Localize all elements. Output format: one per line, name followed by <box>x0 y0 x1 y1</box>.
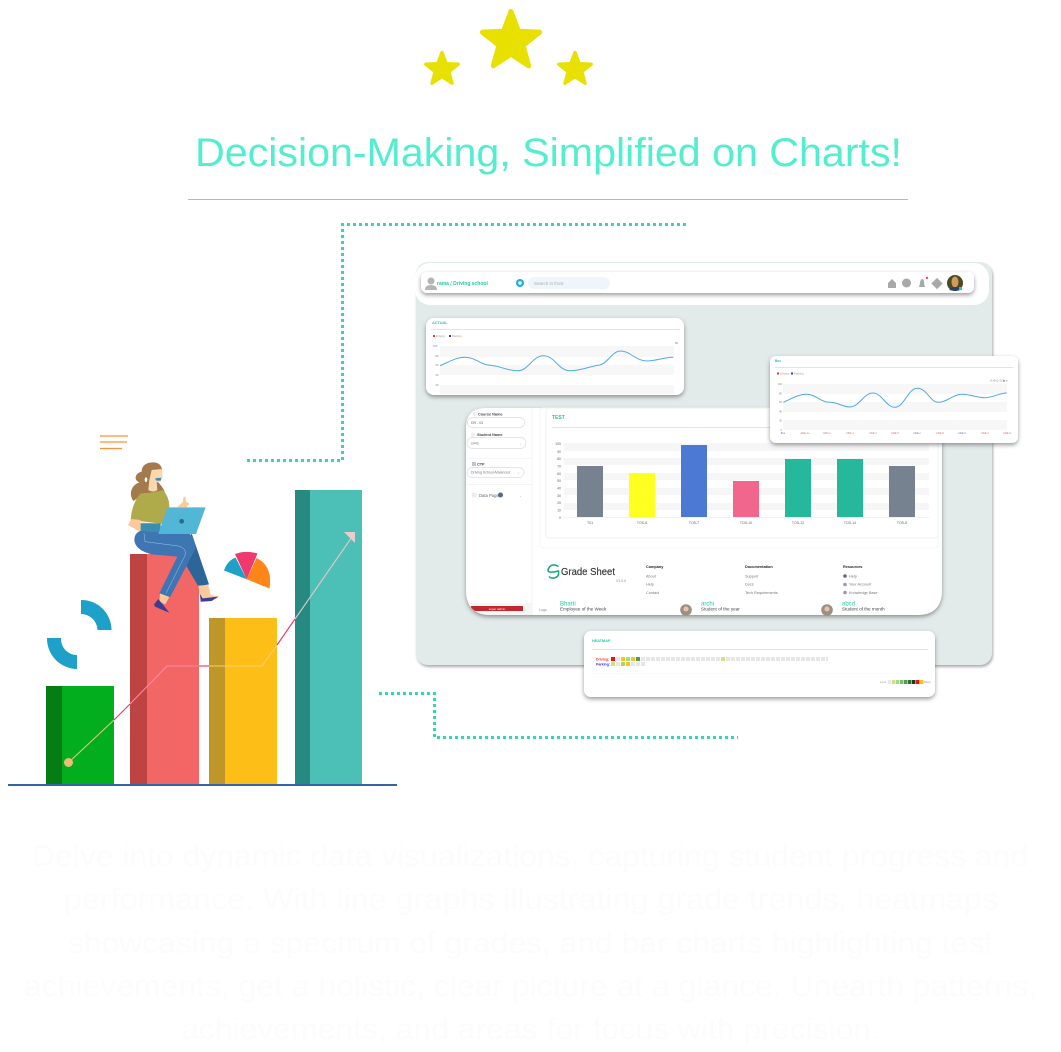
panel: right line chart card: 40 <box>779 410 783 414</box>
footer: link columns: Contact <box>646 591 660 595</box>
panel: heatmap card: HEATMAP <box>592 639 611 643</box>
icon: blue donut chart <box>47 600 112 669</box>
bar chart: TEST: TOS-7 <box>689 521 699 525</box>
panel: right line chart card: ADE-9 <box>1003 431 1011 435</box>
bar chart: TEST: TOS-6 <box>637 521 647 525</box>
footer: student highlights <box>539 602 885 616</box>
footer: student highlights: archi <box>701 602 714 608</box>
panel: actual line chart card <box>426 318 684 395</box>
panel: right line chart card: HBA-c <box>823 431 831 435</box>
panel: right line chart card: 100 <box>778 382 783 386</box>
icon: three stars <box>426 12 591 83</box>
panel: main content area: super admin <box>489 607 506 611</box>
footer: Grade Sheet logo <box>548 565 626 583</box>
panel: actual line chart card: 20 <box>435 383 439 387</box>
panel: right line chart card: 60 <box>779 400 783 404</box>
footer: Grade Sheet logo: V1.0.0 <box>616 579 626 583</box>
sidebar filters: Data Page <box>479 493 499 498</box>
bar chart: TEST: 70 <box>557 464 561 468</box>
panel: right line chart card: ADE-2 <box>981 431 989 435</box>
panel: right line chart card: ⊖ ⊕ Q ☰ ▣ ≡ <box>990 378 1008 382</box>
footer: link columns: Your Account <box>849 582 872 586</box>
text block: description <box>24 840 1037 1046</box>
panel: right line chart card: 20 <box>779 418 783 422</box>
panel: dashboard header: rama / Driving school <box>437 281 488 287</box>
panel: right line chart card: ADE-5 <box>891 431 899 435</box>
sidebar filters: ⌄ <box>517 470 520 474</box>
footer: link columns: Tech Requirements <box>745 591 778 595</box>
sidebar filters: ⌄ <box>519 442 522 446</box>
footer: link columns <box>646 565 878 595</box>
sidebar filters: CTP <box>477 462 485 466</box>
icon: pie chart <box>224 552 270 588</box>
bar chart: TEST: 80 <box>557 457 561 461</box>
bar chart: TEST: T01 <box>587 521 593 525</box>
panel: right line chart card: Driving <box>780 372 789 376</box>
panel: actual line chart card: 40 <box>435 373 439 377</box>
footer: link columns: Company <box>646 565 664 569</box>
bar chart: TEST: 0 <box>559 516 561 520</box>
sidebar filters: Driving School Advanced <box>471 470 510 474</box>
panel: right line chart card: ADE-c <box>913 431 921 435</box>
panel: actual line chart card: 60 <box>435 363 439 367</box>
panel: right line chart card: ADE-7 <box>869 431 877 435</box>
bar chart: TEST: TOS-14 <box>844 521 856 525</box>
footer: link columns: Support <box>745 574 759 578</box>
footer: student highlights: Logo <box>539 608 547 612</box>
bar chart: TEST: 30 <box>557 494 561 498</box>
panel: actual line chart card: Driving <box>436 334 445 338</box>
footer: link columns: Resources <box>843 565 862 569</box>
footer: student highlights: abcd <box>842 602 855 608</box>
arrow: dotted connector bottom <box>379 694 738 738</box>
bar chart: TEST: TEST <box>552 415 565 421</box>
panel: actual line chart card: Parking <box>452 334 462 338</box>
bar chart: TEST: 40 <box>557 486 561 490</box>
chart: illustrated bars <box>8 490 397 786</box>
panel: actual line chart card: 90 <box>675 341 679 345</box>
text block: description: Delve into dynamic data visualizations, capturing student progress and <box>32 840 1028 873</box>
panel: actual line chart card: 100 <box>433 344 438 348</box>
footer: link columns: Help <box>646 582 654 586</box>
panel: right line chart card: Bus <box>775 359 781 363</box>
footer: student highlights: Employee of the Week <box>560 606 607 612</box>
footer: link columns: Docs <box>745 582 754 586</box>
bar chart: TEST: TOS-12 <box>792 521 804 525</box>
footer: link columns: About <box>646 574 657 578</box>
bar chart: TEST: TOS-8 <box>897 521 907 525</box>
text block: description: achievements, get a holistic, clear picture at a glance. Unearth patterns, <box>24 970 1037 1003</box>
panel: right line chart card <box>770 356 1018 443</box>
title: Decision-Making, Simplified on Charts! <box>195 131 902 175</box>
icon: orange text lines <box>100 436 128 448</box>
bar chart: TEST: 60 <box>557 472 561 476</box>
footer: link columns: Documentation <box>745 565 773 569</box>
bar chart: TEST: 90 <box>557 450 561 454</box>
sidebar filters: s443 <box>471 442 479 446</box>
sidebar filters: DR - 03 <box>471 421 483 425</box>
panel: right line chart card: 0 <box>781 428 783 432</box>
panel: heatmap card: Less <box>880 680 887 684</box>
text block: description: performance. With line graphs illustrating grade trends, heatmaps <box>64 883 998 916</box>
text block: description: achievements, and areas for focus with precision. <box>181 1013 880 1046</box>
panel: heatmap card <box>584 631 935 697</box>
panel: dashboard header <box>415 263 989 305</box>
panel: heatmap card: Parking: <box>596 662 610 666</box>
arrow: rising trend line <box>64 532 355 767</box>
panel: main content area <box>466 408 942 616</box>
panel: dashboard background <box>416 262 992 665</box>
sidebar filters: Course Name <box>478 412 502 416</box>
text block: description: showcasing a spectrum of grades, and bar charts highlighting test <box>68 927 994 960</box>
bar chart: TEST <box>540 408 938 548</box>
bar chart: TEST: TOS-10 <box>740 521 752 525</box>
panel: right line chart card: Bus <box>781 431 786 435</box>
panel: heatmap card: Driving: <box>596 658 609 662</box>
footer: student highlights: Student of the month <box>842 606 885 612</box>
panel: right line chart card: 80 <box>779 392 783 396</box>
bar chart: TEST: 100 <box>555 442 561 446</box>
sidebar filters: Student Name <box>477 433 503 437</box>
footer: student highlights: Student of the year <box>701 606 740 612</box>
panel: right line chart card: ADE-6 <box>958 431 966 435</box>
footer: link columns: Help <box>849 574 857 578</box>
bar chart: TEST: 20 <box>557 501 561 505</box>
panel: actual line chart card: 80 <box>435 354 439 358</box>
panel: dashboard header: Search in front <box>534 281 564 286</box>
panel: right line chart card: ADE-8 <box>936 431 944 435</box>
panel: actual line chart card: ACTUAL <box>432 321 448 325</box>
panel: right line chart card: ADE-1a <box>800 431 810 435</box>
arrow: dotted connector top <box>246 224 686 460</box>
sidebar filters <box>467 412 532 498</box>
bar chart: TEST: 50 <box>557 479 561 483</box>
panel: right line chart card: CBA-1 <box>846 431 854 435</box>
sidebar filters: ⌄ <box>519 494 522 498</box>
footer: Grade Sheet logo: Grade Sheet <box>561 566 615 578</box>
bar chart: TEST: 10 <box>557 508 561 512</box>
illustration: woman with laptop <box>128 462 219 613</box>
panel: right line chart card: Parking <box>794 372 804 376</box>
panel: heatmap card: More <box>924 680 931 684</box>
footer: student highlights: Bharti <box>560 602 576 608</box>
footer: link columns: Knowledge Base <box>849 591 878 595</box>
